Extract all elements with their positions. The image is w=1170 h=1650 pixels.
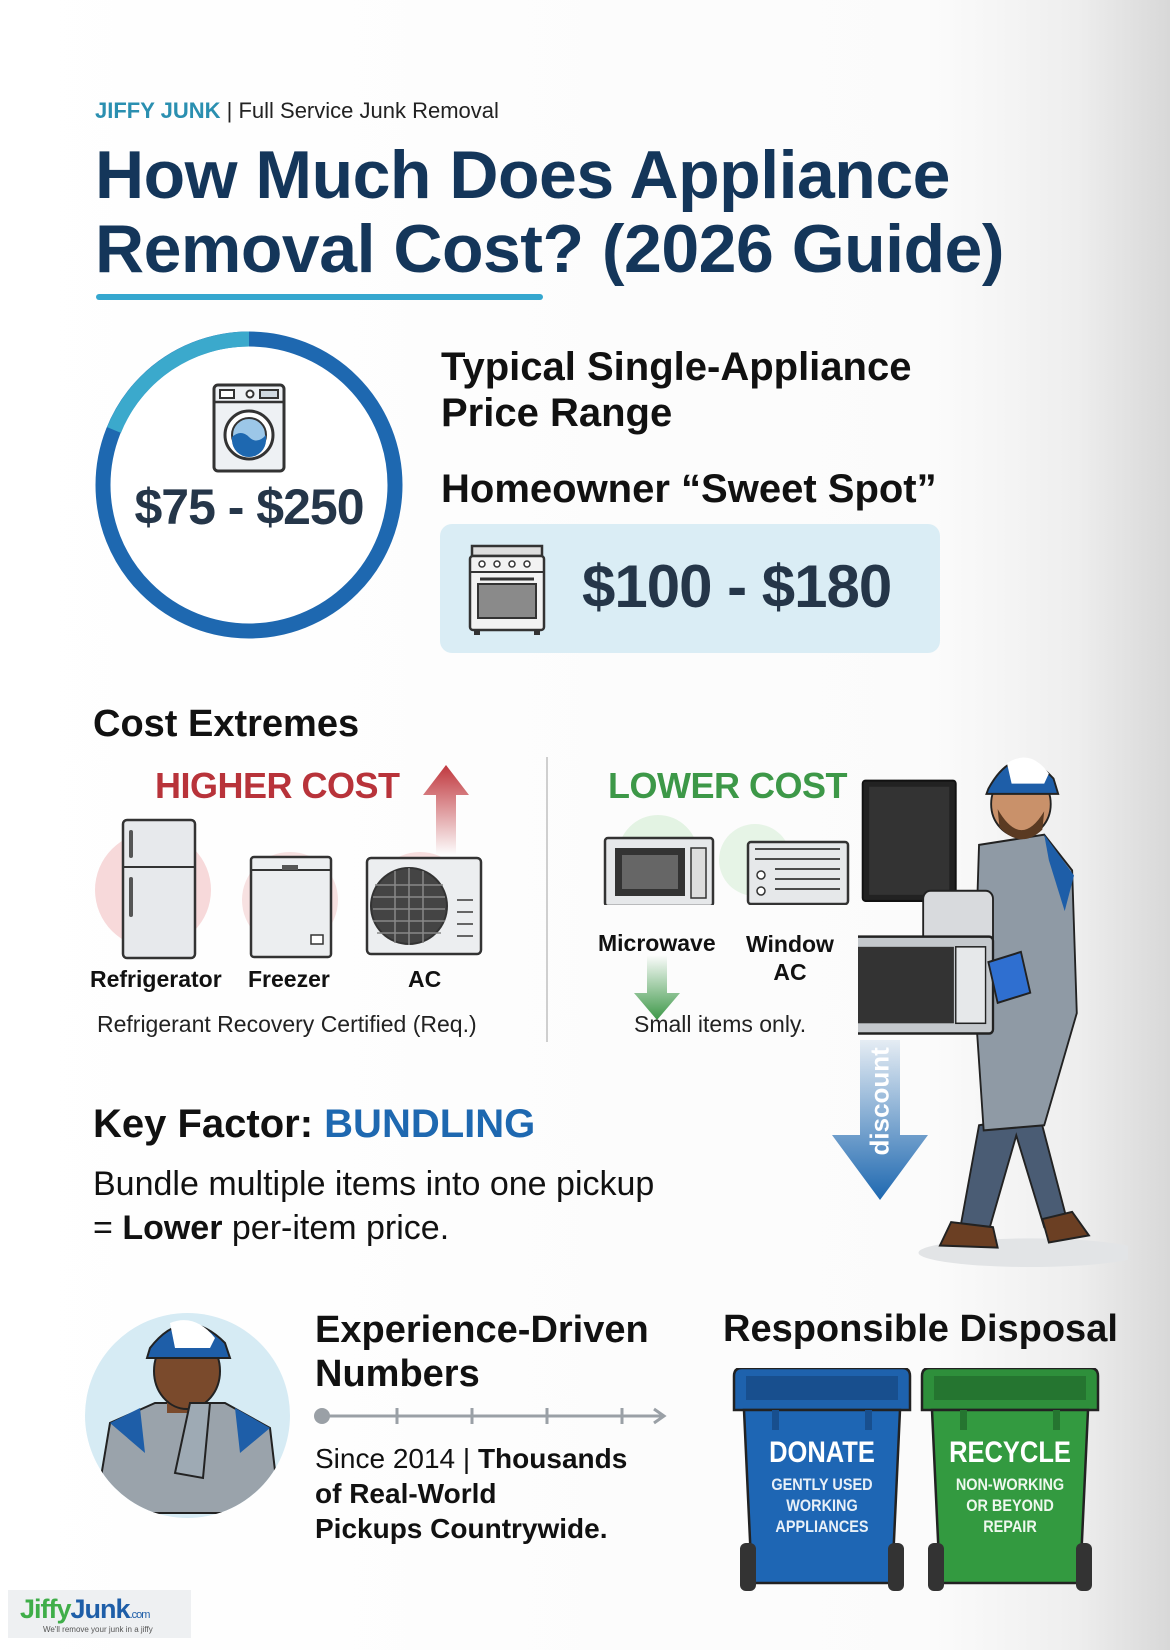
heading: higher cost: HIGHER COST <box>155 765 400 806</box>
labels: Refrigerator <box>90 966 222 992</box>
title <box>95 137 1004 287</box>
key factor heading: Key Factor: BUNDLING <box>93 1102 535 1146</box>
logo: We'll remove your junk in a jiffy <box>43 1625 153 1634</box>
cost extremes heading: Cost Extremes <box>93 703 359 745</box>
icons: refrigerator freezer AC <box>95 818 482 960</box>
logo: JiffyJunk.com <box>20 1594 149 1624</box>
price range ring: $75 - $250 <box>134 479 364 535</box>
experience text: Pickups Countrywide. <box>315 1513 608 1544</box>
typical price heading: Typical Single-Appliance <box>441 345 911 389</box>
panel: higher cost <box>90 765 482 1037</box>
header tagline: JIFFY JUNK | Full Service Junk Removal <box>95 98 499 123</box>
icon: washing machine <box>214 385 284 471</box>
icon: green down arrow <box>634 958 680 1020</box>
title: Removal Cost? (2026 Guide) <box>95 211 1004 287</box>
panel: higher cost: Freezer <box>248 966 330 992</box>
typical price heading: Price Range <box>441 391 672 435</box>
discount arrow: discount <box>864 1047 894 1156</box>
experience text: Since 2014 | Thousands <box>315 1443 627 1474</box>
experience heading: Numbers <box>315 1353 480 1395</box>
price range ring <box>96 332 402 638</box>
icon: red up arrow <box>423 765 469 852</box>
sweet spot heading: Homeowner “Sweet Spot” <box>441 467 937 511</box>
logo <box>8 1590 191 1638</box>
thinking worker portrait <box>85 1313 290 1518</box>
bundling text: Bundle multiple items into one pickup <box>93 1165 654 1203</box>
panel: lower cost <box>598 765 850 1037</box>
heading: lower cost: LOWER COST <box>608 765 847 806</box>
bin: donate <box>732 1368 912 1591</box>
bundling text <box>93 1165 654 1247</box>
experience text <box>315 1443 627 1544</box>
bin: donate: DONATE <box>769 1436 875 1469</box>
sweet spot box: $100 - $180 <box>582 553 891 620</box>
note: Small items only. <box>634 1011 806 1037</box>
bin: recycle <box>920 1368 1100 1591</box>
panel: higher cost: AC <box>408 966 441 992</box>
icons: microwave window AC <box>604 815 850 905</box>
bundling text: = Lower per-item price. <box>93 1209 449 1247</box>
title: How Much Does Appliance <box>95 137 950 213</box>
title underline <box>96 294 543 300</box>
experience heading <box>315 1309 649 1395</box>
experience heading: Experience-Driven <box>315 1309 649 1351</box>
icon: stove <box>468 544 546 635</box>
bin: recycle: RECYCLE <box>949 1436 1071 1469</box>
discount arrow <box>832 1040 928 1200</box>
worker carrying appliances <box>858 758 1093 1267</box>
panel: lower cost: AC <box>773 959 807 985</box>
typical price heading <box>441 345 911 435</box>
bin: donate: APPLIANCES <box>775 1517 869 1536</box>
disposal heading: Responsible Disposal <box>723 1308 1118 1350</box>
bin: recycle: NON-WORKING <box>956 1475 1064 1494</box>
bin: recycle: REPAIR <box>983 1517 1037 1536</box>
experience text: of Real-World <box>315 1478 496 1509</box>
bin: donate: WORKING <box>786 1496 858 1515</box>
sweet spot box <box>440 524 940 653</box>
bin: donate: GENTLY USED <box>771 1475 873 1494</box>
divider <box>546 757 548 1042</box>
bin: recycle: OR BEYOND <box>966 1496 1054 1515</box>
timeline <box>314 1408 666 1424</box>
labels: Microwave <box>598 930 716 956</box>
panel: lower cost: Window <box>746 931 834 957</box>
note: Refrigerant Recovery Certified (Req.) <box>97 1011 477 1037</box>
